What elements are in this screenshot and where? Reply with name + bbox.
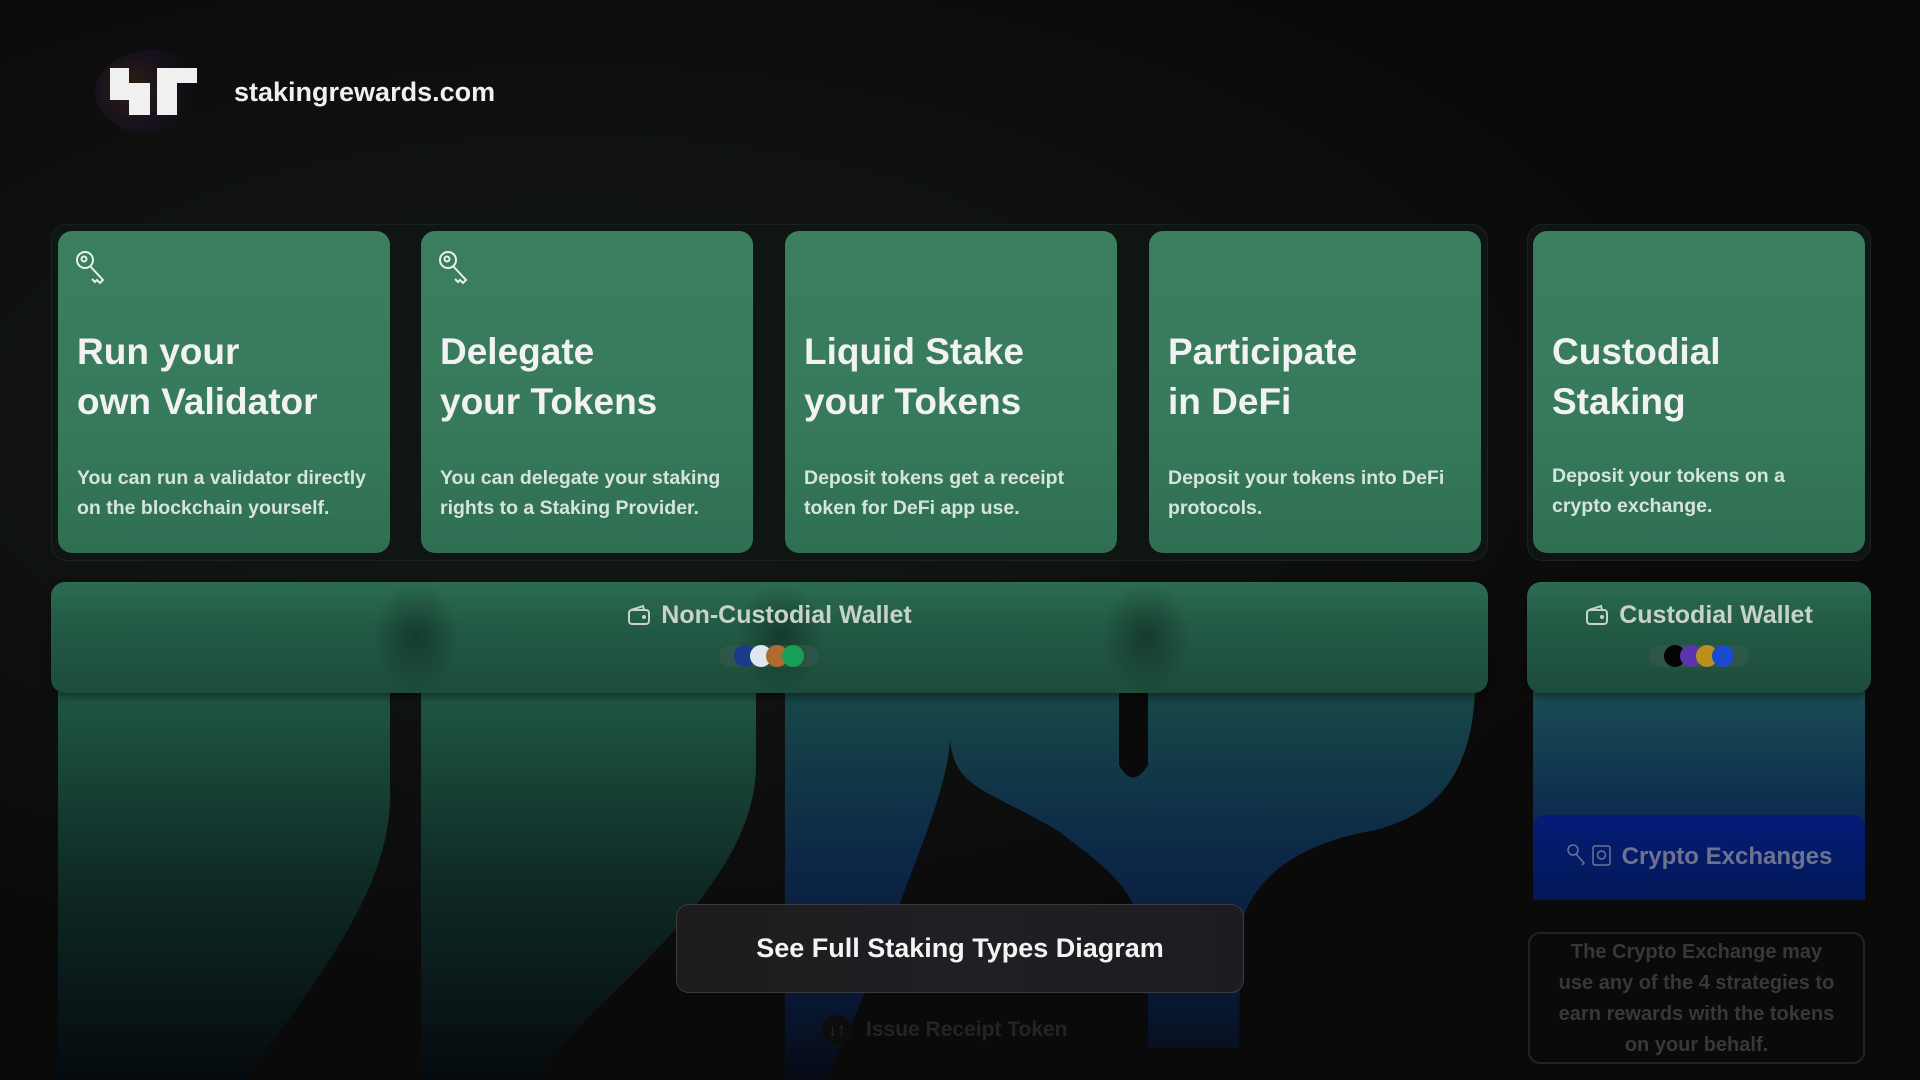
- heading: [1168, 331, 1357, 422]
- logo: [95, 50, 197, 134]
- container: custodial: [1527, 224, 1871, 561]
- note box: on your behalf.: [1625, 1034, 1768, 1056]
- description: Deposit your tokens on a: [1552, 465, 1785, 487]
- button: see full diagram: See Full Staking Types Diagram: [756, 933, 1164, 963]
- heading: [1552, 331, 1721, 422]
- heading: [804, 331, 1024, 422]
- description: rights to a Staking Provider.: [440, 497, 699, 519]
- issue receipt token (faint): Issue Receipt Token: [866, 1018, 1068, 1041]
- heading: own Validator: [77, 381, 318, 422]
- heading: Staking: [1552, 381, 1686, 422]
- icon: key: [76, 251, 104, 284]
- icon: key: [439, 251, 468, 284]
- site name: stakingrewards.com: [234, 77, 495, 107]
- description: [440, 467, 720, 519]
- heading: [440, 331, 657, 422]
- heading: Participate: [1168, 331, 1357, 372]
- description: [804, 467, 1064, 519]
- note box: earn rewards with the tokens: [1559, 1003, 1834, 1025]
- heading: [77, 331, 318, 422]
- description: on the blockchain yourself.: [77, 497, 329, 519]
- note box: The Crypto Exchange may: [1571, 941, 1822, 963]
- button: see full diagram: [676, 904, 1244, 993]
- description: token for DeFi app use.: [804, 497, 1020, 519]
- crypto exchanges box: [1533, 815, 1865, 900]
- issue receipt token (faint): ↓↑: [828, 1020, 846, 1040]
- custodial wallet bar: [1527, 582, 1871, 693]
- issue receipt token (faint): [822, 1015, 1068, 1045]
- label: custodial wallet: Custodial Wallet: [1619, 601, 1813, 629]
- heading: Liquid Stake: [804, 331, 1024, 372]
- description: Deposit your tokens into DeFi: [1168, 467, 1444, 489]
- heading: in DeFi: [1168, 381, 1291, 422]
- non-custodial wallet bar: [51, 582, 1488, 693]
- card: liquid stake: [785, 231, 1117, 553]
- heading: Delegate: [440, 331, 594, 372]
- description: [1168, 467, 1444, 519]
- description: crypto exchange.: [1552, 495, 1712, 517]
- heading: Custodial: [1552, 331, 1721, 372]
- heading: your Tokens: [804, 381, 1021, 422]
- container: four strategies: [51, 224, 1488, 561]
- description: You can run a validator directly: [77, 467, 366, 489]
- coin icons: [1649, 645, 1749, 667]
- note box: [1528, 932, 1865, 1064]
- label: non-custodial wallet: Non-Custodial Wallet: [661, 601, 912, 629]
- card: run validator: [58, 231, 390, 553]
- heading: your Tokens: [440, 381, 657, 422]
- coin icons: [719, 645, 819, 667]
- description: Deposit tokens get a receipt: [804, 467, 1064, 489]
- card: custodial staking: [1533, 231, 1865, 553]
- crypto exchanges box: Crypto Exchanges: [1622, 843, 1832, 870]
- note box: use any of the 4 strategies to: [1559, 972, 1834, 994]
- description: You can delegate your staking: [440, 467, 720, 489]
- description: [77, 467, 366, 519]
- heading: Run your: [77, 331, 239, 372]
- description: protocols.: [1168, 497, 1262, 519]
- card: delegate: [421, 231, 753, 553]
- description: [1552, 465, 1786, 517]
- card: defi: [1149, 231, 1481, 553]
